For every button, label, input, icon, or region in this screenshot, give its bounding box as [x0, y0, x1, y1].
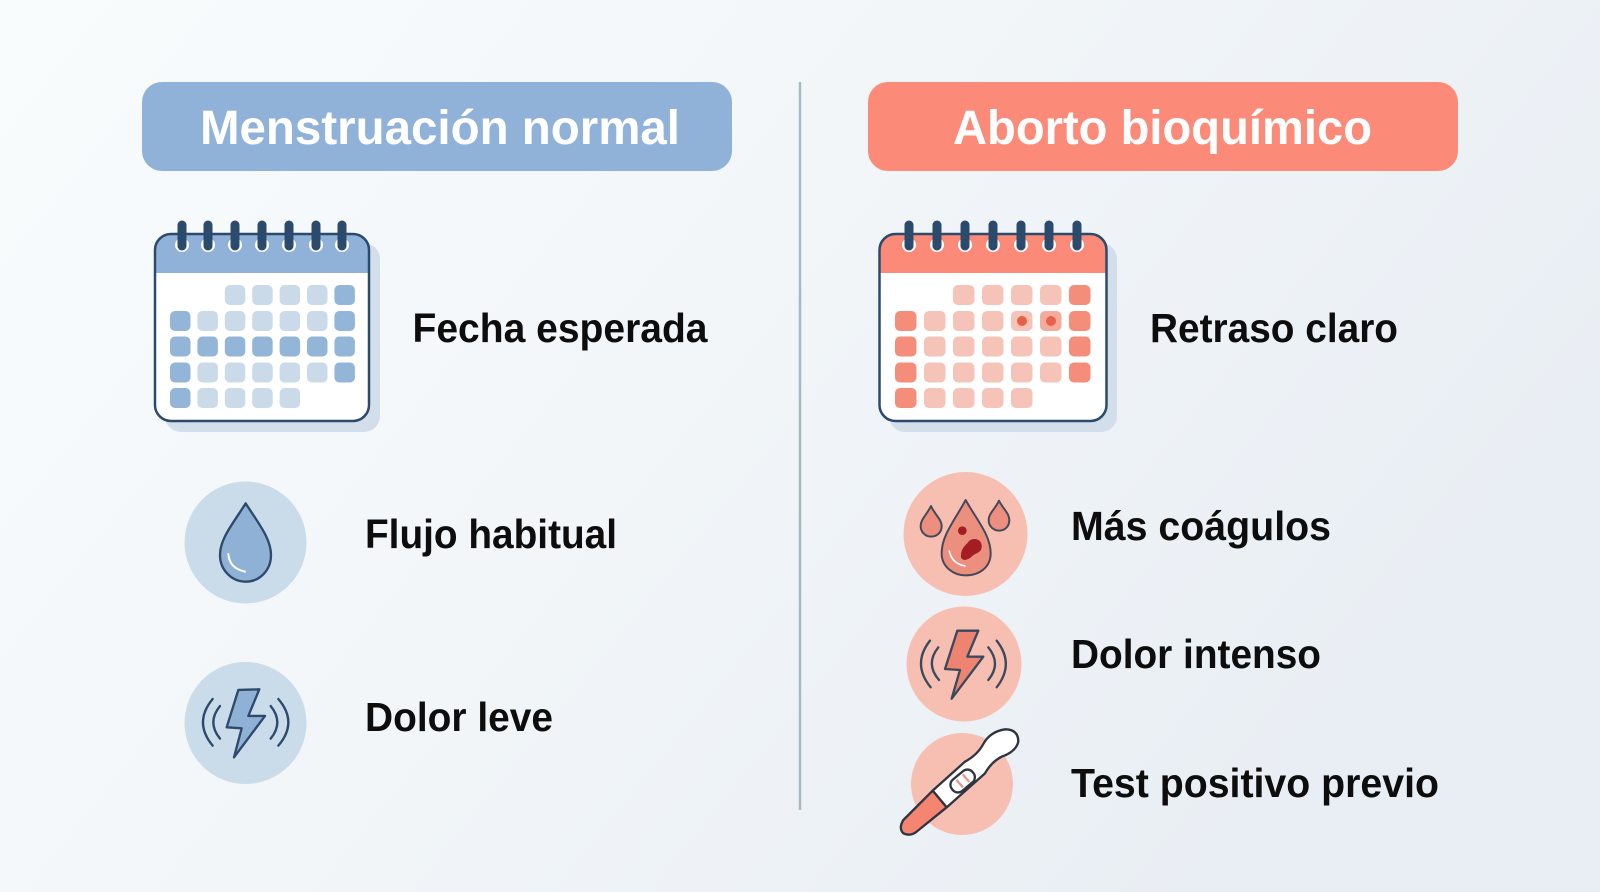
- label: dolor intenso: Dolor intenso: [1071, 631, 1321, 677]
- icon: water drop: [184, 482, 306, 604]
- label: retraso claro: Retraso claro: [1150, 305, 1398, 351]
- label: más coágulos: Más coágulos: [1071, 503, 1331, 549]
- heading: menstruación normal: Menstruación normal: [200, 102, 680, 155]
- label: flujo habitual: Flujo habitual: [365, 511, 617, 557]
- icon: pregnancy test: [901, 729, 1018, 835]
- icon: mild pain bolt: [184, 662, 306, 784]
- icon: blood drops with clots: [904, 472, 1028, 596]
- icon: red calendar: [880, 225, 1117, 432]
- label: fecha esperada: Fecha esperada: [412, 305, 709, 351]
- icon: intense pain bolt: [906, 606, 1022, 722]
- panel: menstruación normal: [142, 82, 732, 784]
- label: test positivo previo: Test positivo previo: [1071, 760, 1439, 806]
- icon: blue calendar: [155, 225, 380, 432]
- heading: aborto bioquímico: Aborto bioquímico: [953, 102, 1372, 155]
- panel: aborto bioquímico: [868, 82, 1458, 835]
- heading: aborto bioquímico: [868, 82, 1458, 171]
- heading: menstruación normal: [142, 82, 732, 171]
- label: dolor leve: Dolor leve: [365, 694, 553, 740]
